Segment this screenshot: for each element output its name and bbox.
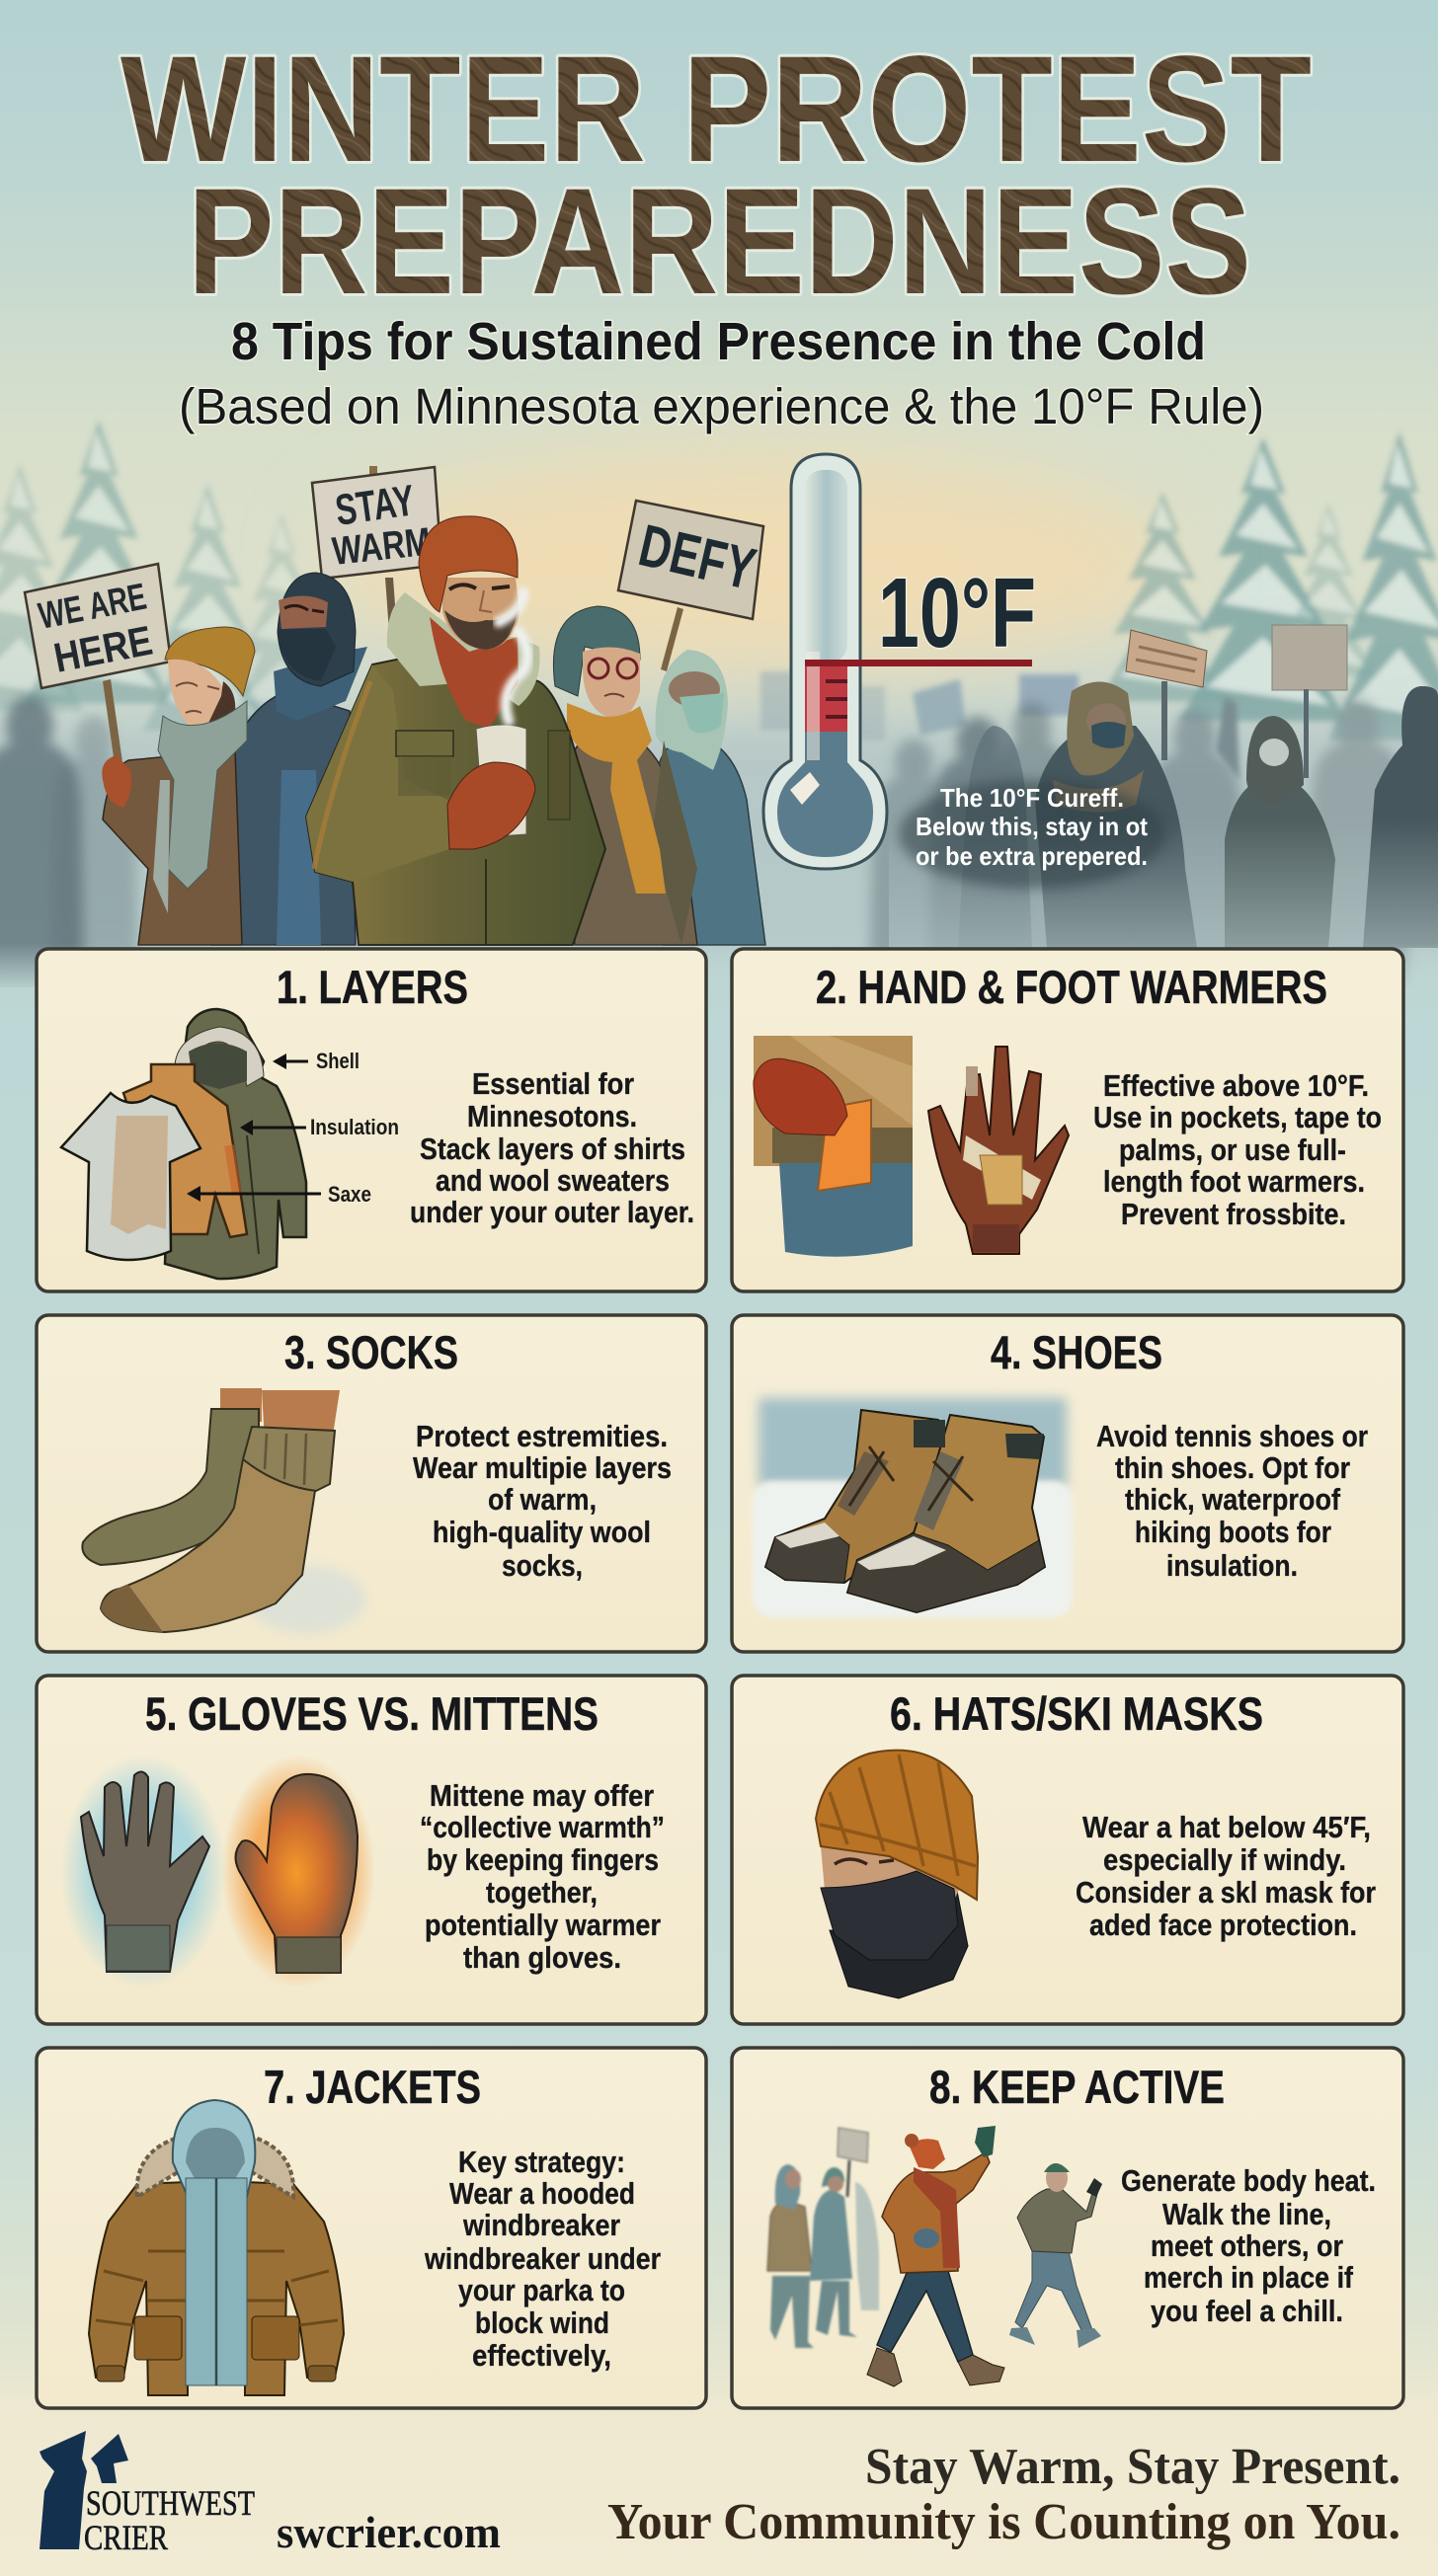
warm horizon glow bbox=[326, 454, 1175, 671]
body text bbox=[1121, 2163, 1376, 2328]
body text bbox=[420, 1778, 665, 1975]
footer: website: swcrier.com bbox=[277, 2507, 501, 2557]
protester at right edge bbox=[1363, 686, 1438, 948]
body text: than gloves. bbox=[463, 1940, 621, 1975]
body text bbox=[1076, 1810, 1376, 1942]
footer: logo bbox=[40, 2431, 255, 2557]
body text: Stack layers of shirts bbox=[420, 1132, 685, 1166]
icon: layered clothing bbox=[61, 1009, 306, 1279]
heading: 3. SOCKS bbox=[284, 1326, 458, 1378]
icon: wool socks bbox=[82, 1388, 365, 1633]
body text: Essential for bbox=[472, 1066, 634, 1101]
body text: effectively, bbox=[472, 2338, 611, 2373]
body text: you feel a chill. bbox=[1151, 2294, 1343, 2328]
protester with tan hood bbox=[1035, 681, 1197, 948]
panel 3: socks bbox=[37, 1315, 706, 1652]
group with sign bbox=[767, 2128, 879, 2348]
body text: length foot warmers. bbox=[1103, 1164, 1365, 1199]
body text: by keeping fingers bbox=[427, 1842, 659, 1877]
icon: mitten with warm halo bbox=[221, 1755, 375, 1988]
body text: Prevent frossbite. bbox=[1121, 1197, 1346, 1231]
caption: 10°F cutoff: Below this, stay in ot bbox=[916, 812, 1148, 841]
hero: winter forest background bbox=[0, 420, 1438, 741]
hero: background crowd left bbox=[0, 696, 138, 1032]
body text: insulation. bbox=[1166, 1548, 1298, 1583]
protester: woman with mustard hat bbox=[102, 627, 255, 945]
body text: and wool sweaters bbox=[436, 1163, 670, 1198]
sign: we are here: WE ARE bbox=[36, 577, 150, 638]
subtitle bbox=[179, 312, 1264, 434]
protester: hooded woman with mask bbox=[656, 650, 765, 945]
body text: Consider a skl mask for bbox=[1076, 1875, 1376, 1910]
body text: merch in place if bbox=[1144, 2260, 1354, 2295]
sign: stay warm: WARM bbox=[330, 520, 433, 574]
protester: balaclava bbox=[211, 573, 367, 945]
heading: 6. HATS/SKI MASKS bbox=[890, 1687, 1263, 1740]
temperature label 10°F bbox=[805, 558, 1036, 668]
caption: 10°F cutoff: The 10°F Cureff. bbox=[940, 783, 1124, 813]
sign: stay warm: STAY bbox=[333, 476, 418, 535]
subtitle: 8 Tips for Sustained Presence in the Cold bbox=[231, 312, 1206, 371]
title bbox=[120, 25, 1312, 326]
panel 2: hand and foot warmers bbox=[732, 949, 1403, 1291]
icon: hat and face mask bbox=[816, 1751, 978, 1998]
body text: of warm, bbox=[488, 1482, 597, 1517]
caption: 10°F cutoff: or be extra prepered. bbox=[916, 841, 1148, 871]
sign: stay warm bbox=[312, 466, 441, 632]
second walker bbox=[1009, 2163, 1102, 2348]
body text: under your outer layer. bbox=[410, 1195, 694, 1229]
protester: woman with glasses bbox=[553, 606, 697, 945]
panel 5: gloves vs mittens bbox=[37, 1676, 706, 2024]
main walker bbox=[867, 2126, 1004, 2386]
callouts: layer labels: Shell bbox=[316, 1049, 360, 1073]
body text: Walk the line, bbox=[1162, 2197, 1331, 2231]
body text bbox=[413, 1419, 672, 1583]
body text: “collective warmth” bbox=[420, 1810, 665, 1844]
panel 1: layers bbox=[37, 949, 706, 1291]
icon: glove with cold halo bbox=[60, 1755, 226, 1988]
body text: socks, bbox=[502, 1548, 583, 1583]
hero: tan and grey placards bbox=[1126, 625, 1347, 778]
sign: defy bbox=[618, 501, 763, 671]
hero: background crowd right bbox=[760, 671, 1407, 1012]
hero: fade into page background bbox=[0, 943, 1438, 992]
body text: high-quality wool bbox=[433, 1515, 651, 1549]
heading: 2. HAND & FOOT WARMERS bbox=[816, 961, 1327, 1013]
body text: Wear multipie layers bbox=[413, 1450, 672, 1485]
body text: potentially warmer bbox=[425, 1908, 661, 1942]
hero: protest signs bbox=[25, 466, 763, 792]
body text: Key strategy: bbox=[458, 2145, 625, 2179]
body text: Mittene may offer bbox=[430, 1778, 654, 1813]
temperature label 10°F: 10°F bbox=[878, 558, 1036, 668]
body text: Wear a hat below 45′F, bbox=[1082, 1810, 1371, 1844]
body text: together, bbox=[486, 1875, 598, 1910]
footer: closing message: Your Community is Counting on You. bbox=[607, 2494, 1400, 2550]
heading: 1. LAYERS bbox=[277, 961, 468, 1013]
body text: Use in pockets, tape to bbox=[1093, 1100, 1382, 1134]
body text: Protect estremities. bbox=[416, 1419, 668, 1453]
body text bbox=[410, 1066, 694, 1229]
protester: main man with cup bbox=[306, 516, 605, 945]
footer: logo: SOUTHWEST bbox=[86, 2483, 255, 2523]
icon: warmer in pocket bbox=[754, 1036, 913, 1257]
icon: hiking boots in snow bbox=[753, 1398, 1073, 1617]
body text: Effective above 10°F. bbox=[1103, 1068, 1369, 1103]
callouts: layer labels: Saxe bbox=[328, 1182, 371, 1207]
body text: block wind bbox=[475, 2305, 609, 2340]
panel 7: jackets bbox=[37, 2048, 706, 2408]
body text: palms, or use full- bbox=[1119, 1132, 1346, 1167]
sign: defy: DEFY bbox=[633, 511, 761, 602]
icon: parka with hooded layer bbox=[89, 2100, 344, 2395]
body text: especially if windy. bbox=[1103, 1842, 1346, 1877]
hero: foreground protesters bbox=[102, 516, 765, 945]
icon: logo silhouette bbox=[40, 2431, 128, 2549]
sign: we are here: HERE bbox=[50, 617, 156, 681]
haze over lower crowd bbox=[889, 835, 1438, 948]
heading: 5. GLOVES VS. MITTENS bbox=[145, 1687, 599, 1740]
body text: Wear a hooded bbox=[449, 2176, 635, 2211]
body text: hiking boots for bbox=[1135, 1515, 1331, 1549]
thermometer bbox=[763, 454, 887, 869]
caption: 10°F cutoff bbox=[899, 780, 1165, 889]
callouts: layer labels bbox=[187, 1049, 399, 1207]
body text bbox=[424, 2145, 661, 2373]
hooded protester behind bbox=[958, 726, 1032, 948]
hero: midground protesters right bbox=[889, 681, 1438, 948]
protester with white mask bbox=[1225, 716, 1335, 948]
icon: hand with warmer bbox=[928, 1047, 1069, 1254]
callouts: layer labels: Insulation bbox=[310, 1115, 399, 1139]
panel 6: hats and ski masks bbox=[732, 1676, 1403, 2024]
body text: thick, waterproof bbox=[1125, 1482, 1341, 1517]
title: PREPAREDNESS bbox=[188, 157, 1251, 326]
body text: thin shoes. Opt for bbox=[1115, 1450, 1350, 1485]
icon: people walking bbox=[767, 2126, 1102, 2386]
heading: 7. JACKETS bbox=[264, 2061, 481, 2113]
body text: windbreaker bbox=[462, 2208, 620, 2242]
body text: meet others, or bbox=[1151, 2228, 1343, 2263]
footer: logo: CRIER bbox=[84, 2518, 168, 2557]
body text: Avoid tennis shoes or bbox=[1096, 1419, 1368, 1453]
hero: fog band bbox=[0, 731, 1438, 958]
title: WINTER PROTEST bbox=[120, 25, 1312, 194]
body text: Generate body heat. bbox=[1121, 2163, 1376, 2198]
heading: 4. SHOES bbox=[991, 1326, 1162, 1378]
heading: 8. KEEP ACTIVE bbox=[929, 2061, 1225, 2113]
footer: closing message bbox=[607, 2439, 1400, 2550]
body text: Minnesotons. bbox=[467, 1099, 637, 1133]
subtitle: (Based on Minnesota experience & the 10°F Rule) bbox=[179, 378, 1264, 434]
body text bbox=[1096, 1419, 1368, 1583]
panel 8: keep active bbox=[732, 2048, 1403, 2408]
body text: aded face protection. bbox=[1089, 1908, 1357, 1942]
footer: closing message: Stay Warm, Stay Present. bbox=[865, 2439, 1400, 2495]
sign: we are here bbox=[25, 564, 171, 792]
body text: your parka to bbox=[458, 2273, 625, 2307]
panel 4: shoes bbox=[732, 1315, 1403, 1652]
body text: windbreaker under bbox=[424, 2241, 661, 2276]
body text bbox=[1093, 1068, 1382, 1231]
